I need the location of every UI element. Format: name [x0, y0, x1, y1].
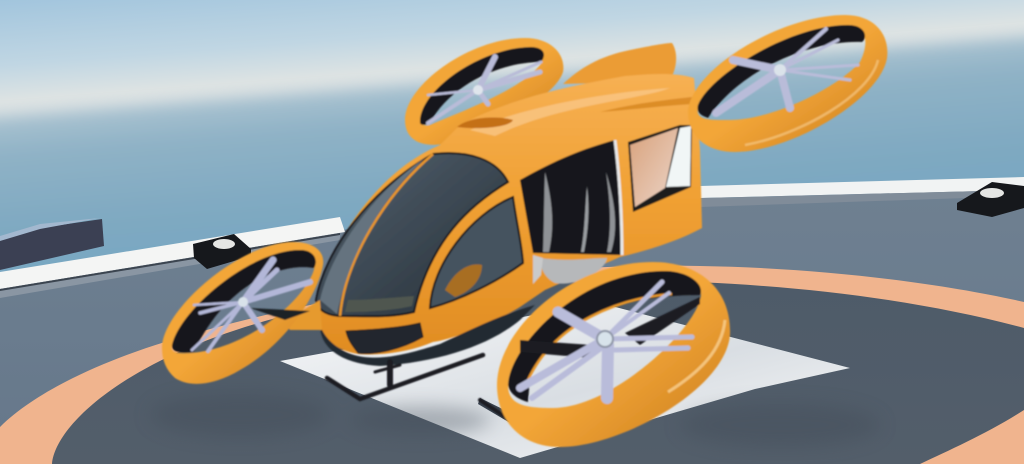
white landing mark [280, 303, 850, 458]
sky [0, 0, 1024, 240]
inner landing circle [52, 281, 1024, 464]
drone [162, 15, 887, 447]
side window [430, 197, 523, 308]
front left rotor [162, 242, 323, 384]
cockpit canopy [316, 153, 508, 316]
rear right rotor [688, 15, 887, 152]
landing skid [327, 355, 510, 420]
left deck light [193, 234, 251, 269]
nose grille [346, 323, 423, 353]
far structure on left [0, 218, 104, 270]
orange landing ring [0, 266, 1024, 464]
right deck light [957, 182, 1024, 217]
helipad deck [0, 188, 1024, 464]
cabin interior [520, 140, 622, 284]
door frame [615, 140, 622, 255]
front right rotor [497, 262, 730, 447]
rear left rotor [405, 38, 563, 145]
tail fin [563, 43, 676, 84]
white deck rim [0, 177, 1024, 298]
sea [0, 35, 1024, 320]
underbody [320, 305, 535, 366]
fuselage [316, 74, 702, 354]
door window [628, 125, 692, 212]
deck shadows [150, 393, 880, 447]
